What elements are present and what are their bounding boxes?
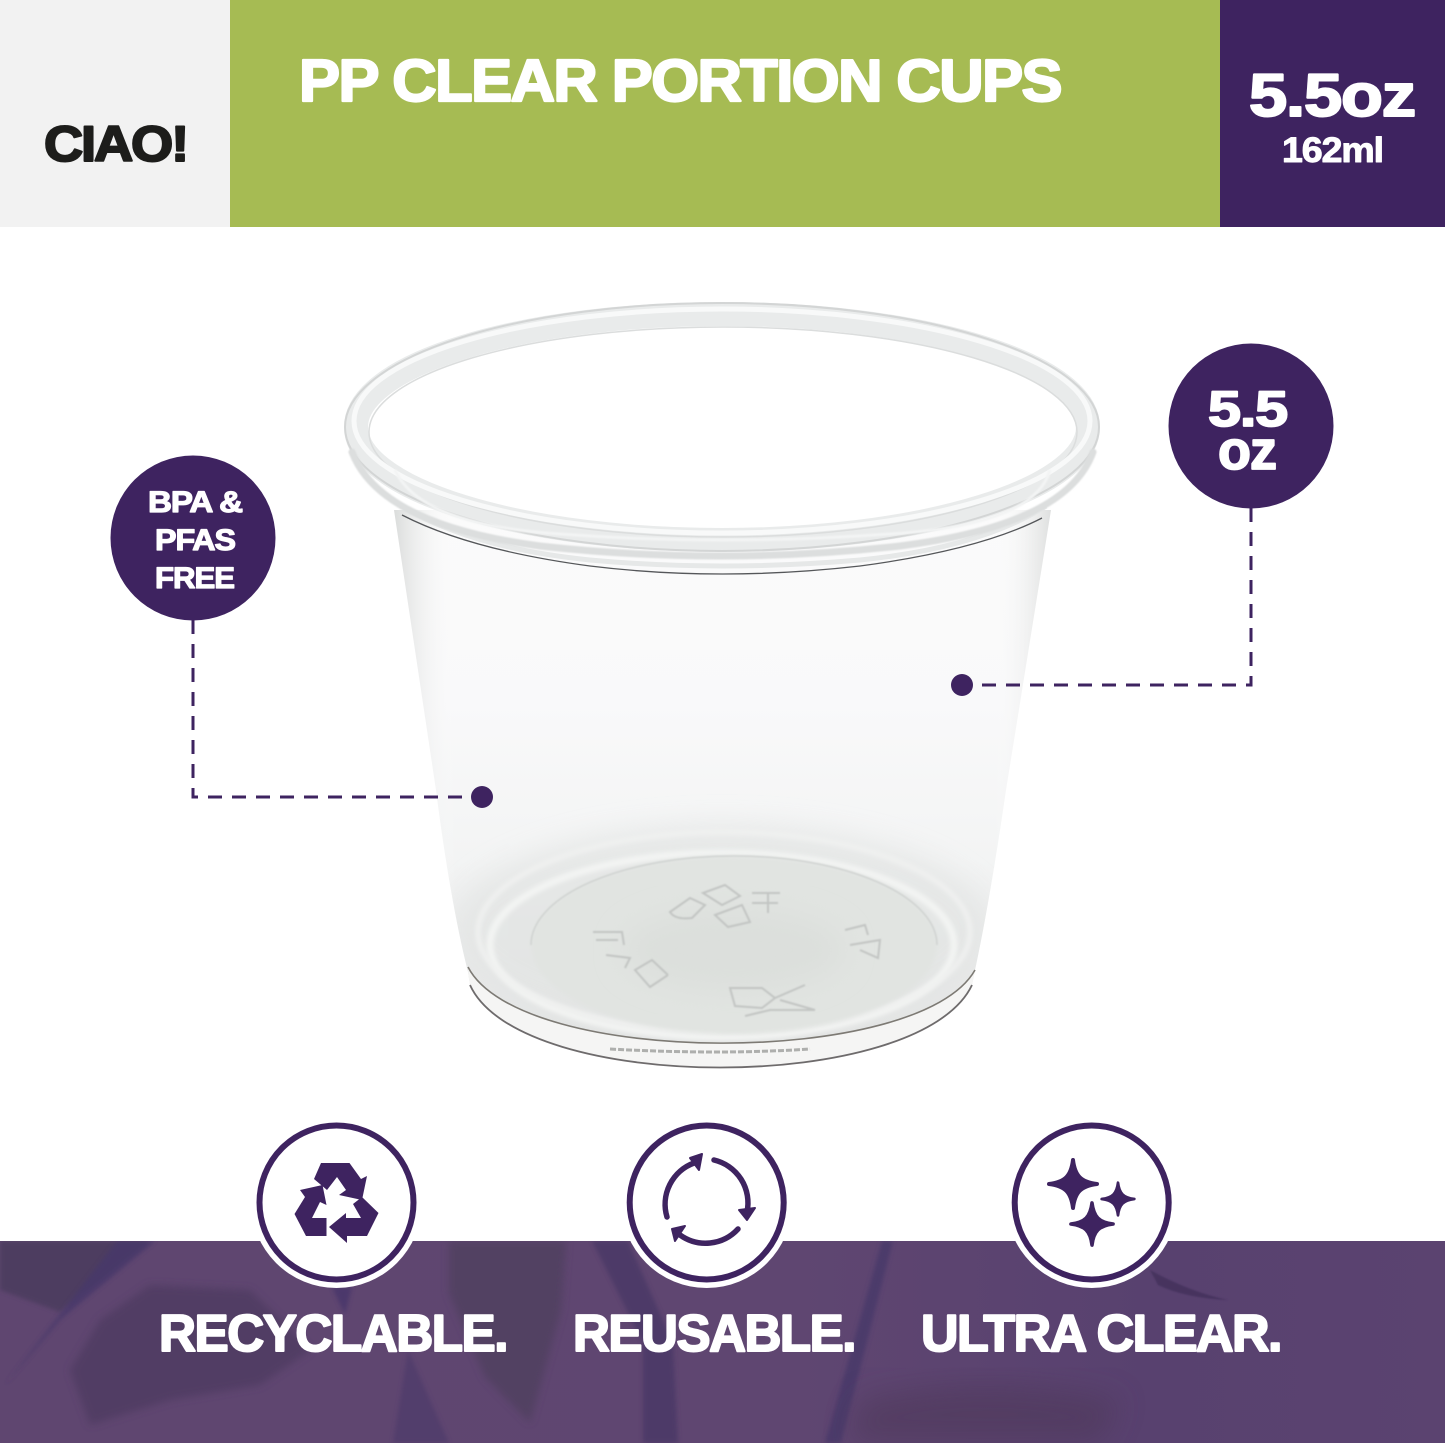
- callout: capacity: [951, 344, 1334, 696]
- title panel: PP CLEAR PORTION CUPS: [299, 48, 1061, 114]
- icon: recycle: [251, 1117, 422, 1288]
- cup base ridges: [490, 853, 954, 1037]
- callout badge: [1168, 344, 1334, 508]
- callout badge: BPA &: [148, 486, 242, 519]
- feature: recyclable: [159, 1117, 507, 1363]
- embossed base marks: [593, 885, 880, 1016]
- icon: sparkles: [1006, 1117, 1177, 1288]
- cup body: [390, 500, 1060, 1080]
- size panel: 5.5oz: [1249, 62, 1415, 129]
- brand panel: [0, 0, 230, 227]
- callout: BPA and PFAS free: [110, 456, 493, 808]
- callout dot: [951, 674, 973, 696]
- title panel: [230, 0, 1220, 227]
- product photo: clear cup: [345, 303, 1099, 1080]
- leader line: [193, 620, 482, 797]
- callout badge: 5.5: [1208, 381, 1287, 437]
- bottom purple band with leaf texture: [0, 1241, 1445, 1443]
- callout badge: FREE: [155, 562, 234, 595]
- callout badge: oz: [1218, 419, 1276, 481]
- leader line: [962, 508, 1251, 685]
- feature: reusable: [573, 1117, 855, 1363]
- callout dot: [471, 786, 493, 808]
- cup bottom edge: [468, 967, 975, 1068]
- label: RECYCLABLE.: [159, 1305, 507, 1363]
- cup rim: [345, 303, 1099, 574]
- brand panel: CIAO!: [44, 116, 187, 172]
- label: REUSABLE.: [573, 1305, 855, 1363]
- cup base disc: [531, 856, 937, 1034]
- size panel: [1220, 0, 1445, 227]
- icon: cycle arrows: [621, 1117, 792, 1288]
- callout badge: [110, 456, 276, 620]
- size panel: 162ml: [1282, 131, 1383, 170]
- callout badge: PFAS: [155, 524, 235, 557]
- label: ULTRA CLEAR.: [921, 1305, 1281, 1363]
- header band: [0, 0, 1445, 227]
- feature: ultra clear: [921, 1117, 1281, 1363]
